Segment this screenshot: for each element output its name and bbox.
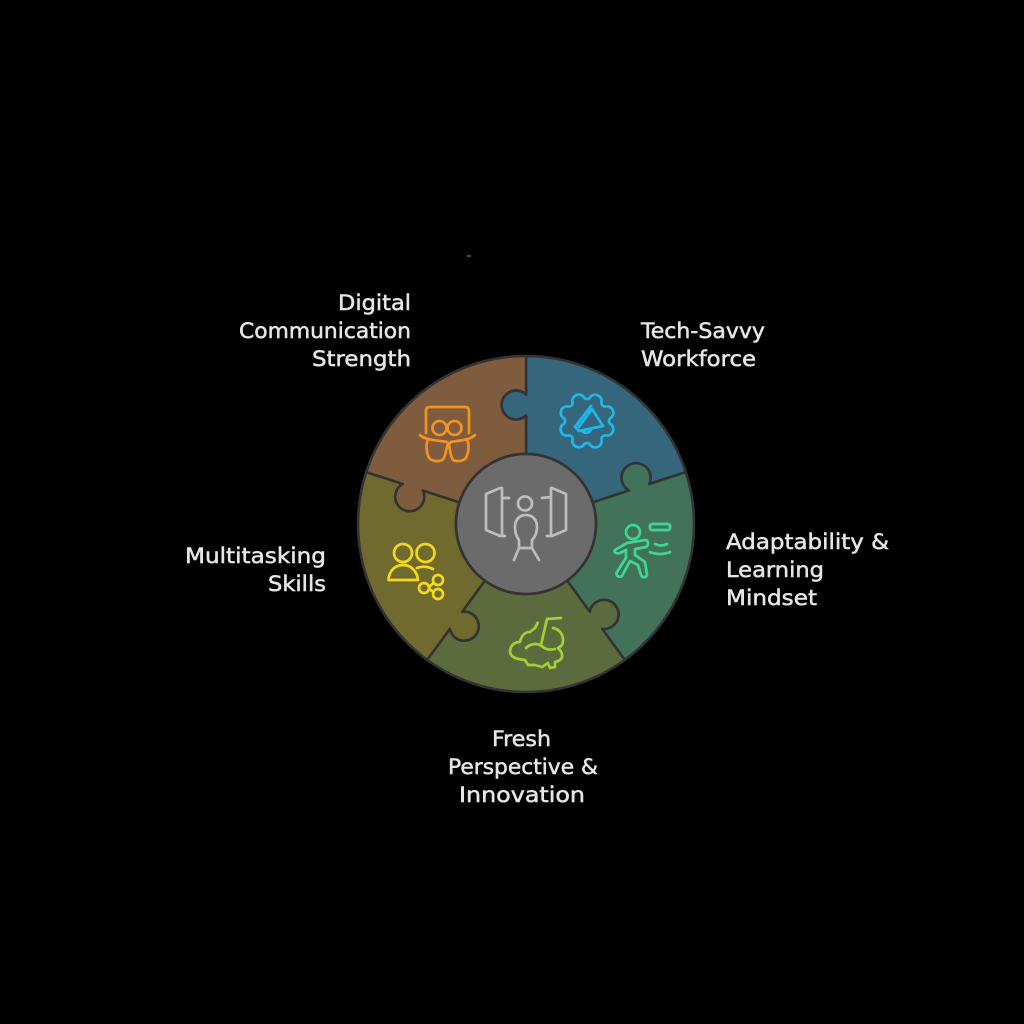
icon: reader with glasses and book <box>420 407 475 461</box>
label: digital communication strength <box>239 291 411 371</box>
label: multitasking skills: Multitasking <box>185 544 326 568</box>
segment: tech-savvy workforce <box>502 356 686 502</box>
segment: fresh perspective and innovation <box>409 527 645 754</box>
label: fresh perspective and innovation: Perspective & <box>448 755 598 779</box>
label: multitasking skills <box>185 544 326 596</box>
label: adaptability and learning mindset: Learning <box>726 558 824 582</box>
label: adaptability and learning mindset: Adaptability & <box>726 530 889 554</box>
icon: running person with signs <box>614 524 670 577</box>
label: multitasking skills: Skills <box>268 572 326 596</box>
segment: digital communication strength <box>359 320 555 541</box>
label: tech-savvy workforce <box>640 319 765 371</box>
segment: adaptability and learning mindset <box>539 449 735 669</box>
icon: person between doors <box>486 488 566 560</box>
label: fresh perspective and innovation <box>448 727 598 807</box>
label: digital communication strength: Strength <box>312 347 411 371</box>
icon: two people with network <box>388 544 443 599</box>
label: fresh perspective and innovation: Innovation <box>459 783 585 807</box>
center hub <box>456 454 596 594</box>
label: adaptability and learning mindset <box>726 530 889 610</box>
label: digital communication strength: Digital <box>338 291 411 315</box>
label: digital communication strength: Communication <box>239 319 411 343</box>
icon: megaphone in gear <box>551 385 623 457</box>
label: adaptability and learning mindset: Mindset <box>726 586 817 610</box>
label: tech-savvy workforce: Workforce <box>641 347 756 371</box>
label: fresh perspective and innovation: Fresh <box>492 727 551 751</box>
label: tech-savvy workforce: Tech-Savvy <box>640 319 765 343</box>
icon: brain with arm <box>510 618 563 668</box>
segment: multitasking skills <box>298 448 533 674</box>
panel: puzzle wheel <box>298 320 735 754</box>
